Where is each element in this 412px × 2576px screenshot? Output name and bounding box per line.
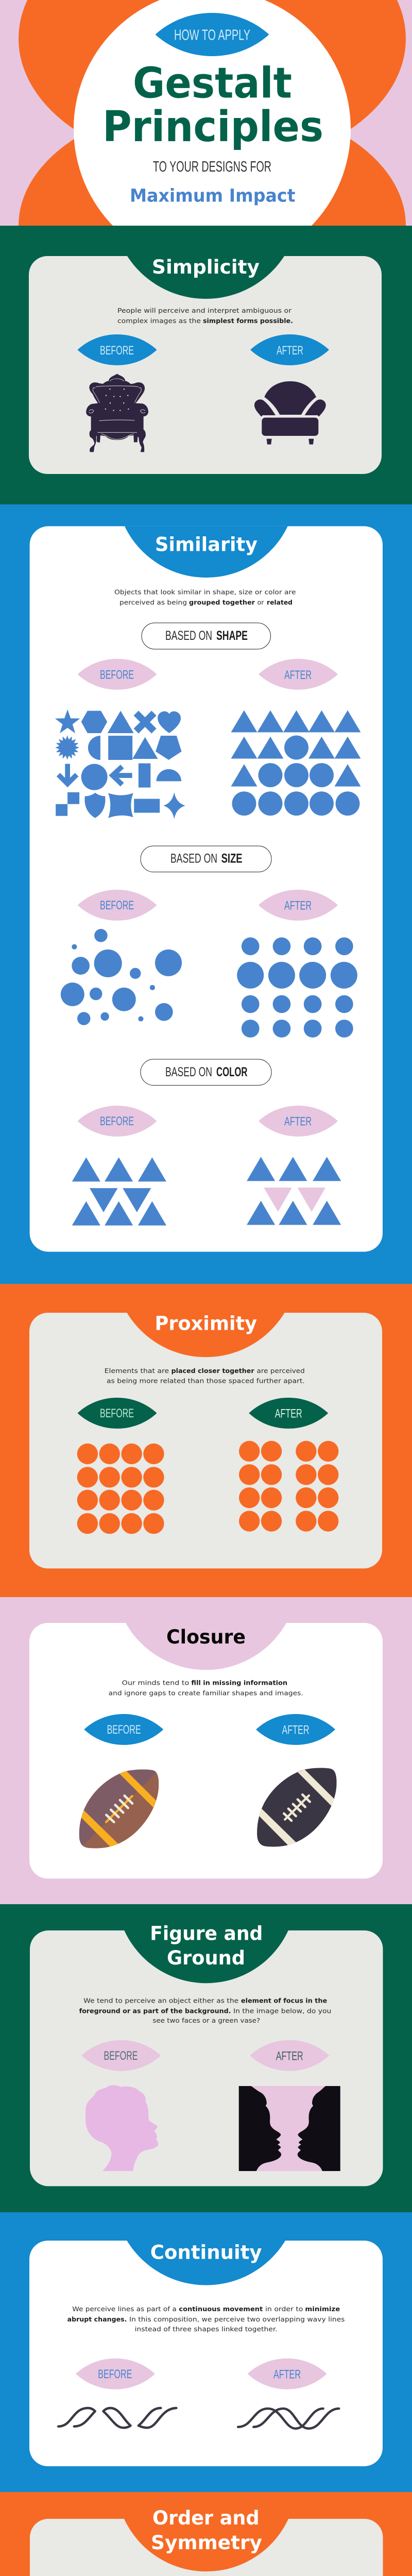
label: before: BEFORE bbox=[100, 899, 134, 912]
label: before: BEFORE bbox=[104, 2049, 138, 2063]
label: before bbox=[81, 2040, 161, 2071]
description: foreground or as part of the background. bbox=[79, 2007, 231, 2014]
icon: faces and vase illusion bbox=[239, 2086, 340, 2171]
icon: football after bbox=[257, 1768, 337, 1846]
panel: similarity bbox=[0, 504, 412, 1284]
panel: continuity bbox=[0, 2212, 412, 2492]
heading: proximity: Proximity bbox=[154, 1313, 257, 1335]
label: after bbox=[248, 2359, 327, 2389]
icon: head silhouette bbox=[85, 2085, 158, 2171]
pill: based on shape: BASED ON bbox=[165, 629, 212, 643]
shapes: grouped triangles and circles after bbox=[231, 710, 361, 816]
description: continuous movement bbox=[179, 2305, 263, 2313]
label: before bbox=[84, 1714, 163, 1745]
label: after bbox=[259, 1106, 338, 1137]
label: before bbox=[77, 1106, 157, 1137]
title: Gestalt Principles bbox=[102, 59, 323, 151]
pill: based on size: SIZE bbox=[221, 851, 243, 866]
description: element of focus in the bbox=[241, 1996, 327, 2004]
label: after bbox=[259, 659, 338, 690]
label: before: BEFORE bbox=[100, 1114, 134, 1128]
badge: how to apply: HOW TO APPLY bbox=[174, 27, 250, 43]
title: Gestalt Principles: Gestalt bbox=[133, 59, 292, 108]
label: before: BEFORE bbox=[98, 2367, 132, 2381]
description: simplest forms possible. bbox=[203, 317, 293, 325]
label: after: AFTER bbox=[282, 1723, 309, 1737]
description bbox=[67, 2305, 345, 2333]
label: after: AFTER bbox=[284, 1115, 312, 1129]
pill: based on shape bbox=[142, 623, 271, 649]
icon: football before bbox=[79, 1769, 159, 1849]
description: and ignore gaps to create familiar shapes and images. bbox=[109, 1689, 303, 1697]
heading: order and symmetry: Symmetry bbox=[151, 2532, 262, 2554]
description: We perceive lines as part of a bbox=[72, 2305, 177, 2313]
title: Gestalt Principles: Principles bbox=[102, 103, 323, 151]
description: minimize bbox=[305, 2305, 340, 2313]
panel: figure and ground bbox=[0, 1904, 412, 2212]
description: People will perceive and interpret ambiguous or bbox=[117, 307, 292, 314]
badge: how to apply bbox=[156, 13, 269, 56]
pill: based on color: BASED ON bbox=[165, 1065, 212, 1079]
description: see two faces or a green vase? bbox=[152, 2016, 260, 2024]
description: or bbox=[258, 599, 264, 606]
heading: order and symmetry: Order and bbox=[152, 2507, 260, 2529]
panel: proximity bbox=[0, 1284, 412, 1597]
label: before bbox=[77, 334, 157, 365]
label: after bbox=[249, 1398, 328, 1429]
label: after: AFTER bbox=[273, 2368, 301, 2382]
label: before: BEFORE bbox=[100, 344, 134, 358]
description: Our minds tend to bbox=[122, 1679, 189, 1686]
shapes: blue and pink triangles after bbox=[247, 1157, 341, 1225]
description: In this composition, we perceive two overlapping wavy lines bbox=[129, 2315, 345, 2323]
shapes: ordered circles after bbox=[237, 937, 357, 1038]
icon: ornate armchair bbox=[86, 374, 148, 452]
heading: closure: Closure bbox=[166, 1626, 246, 1648]
description: We tend to perceive an object either as the bbox=[83, 1996, 239, 2004]
description bbox=[109, 1679, 303, 1697]
label: before bbox=[77, 659, 157, 690]
shapes: random circles before bbox=[61, 929, 182, 1025]
pill: based on size bbox=[141, 846, 271, 872]
description: in order to bbox=[265, 2305, 303, 2313]
icon: simple armchair bbox=[254, 381, 326, 445]
label: after bbox=[259, 890, 338, 921]
description bbox=[79, 1996, 331, 2024]
description: complex images as the bbox=[117, 317, 201, 325]
subtitle: TO YOUR DESIGNS FOR bbox=[153, 159, 271, 175]
panel: simplicity bbox=[0, 226, 412, 504]
label: after: AFTER bbox=[275, 1407, 302, 1421]
description: Elements that are bbox=[105, 1367, 169, 1375]
label: after: AFTER bbox=[284, 899, 312, 913]
description: grouped together bbox=[189, 599, 255, 606]
label: after bbox=[250, 334, 329, 365]
heading: simplicity: Simplicity bbox=[152, 256, 260, 278]
label: after: AFTER bbox=[276, 2049, 303, 2063]
panel: closure bbox=[29, 1623, 383, 1878]
description: instead of three shapes linked together. bbox=[135, 2325, 278, 2333]
label: after bbox=[250, 2040, 329, 2071]
description: perceived as being bbox=[119, 599, 187, 606]
label: before: BEFORE bbox=[107, 1723, 141, 1737]
pill: based on color bbox=[141, 1059, 271, 1085]
description: are perceived bbox=[256, 1367, 305, 1375]
label: before bbox=[76, 2359, 155, 2389]
description: related bbox=[267, 599, 293, 606]
label: before bbox=[77, 890, 157, 921]
label: before: BEFORE bbox=[100, 1406, 134, 1420]
description: abrupt changes. bbox=[67, 2315, 127, 2323]
heading: figure and ground bbox=[150, 1922, 263, 1969]
heading: order and symmetry bbox=[151, 2507, 262, 2554]
heading: figure and ground: Ground bbox=[167, 1947, 245, 1969]
label: after: AFTER bbox=[284, 668, 312, 682]
label: before: BEFORE bbox=[100, 668, 134, 682]
description: as being more related than those spaced further apart. bbox=[107, 1377, 305, 1385]
description: fill in missing information bbox=[191, 1679, 287, 1686]
label: after: AFTER bbox=[277, 344, 303, 358]
header: title block bbox=[0, 0, 412, 349]
description: Objects that look similar in shape, size or color are bbox=[114, 588, 296, 596]
description: placed closer together bbox=[171, 1367, 254, 1375]
description bbox=[117, 307, 293, 325]
pill: based on size: BASED ON bbox=[170, 851, 217, 866]
description bbox=[105, 1367, 305, 1385]
pill: based on shape: SHAPE bbox=[216, 629, 248, 643]
pill: based on color: COLOR bbox=[216, 1065, 247, 1079]
shapes: blue triangles before bbox=[72, 1157, 166, 1226]
heading: figure and ground: Figure and bbox=[150, 1922, 263, 1944]
label: after bbox=[256, 1714, 335, 1745]
label: before bbox=[77, 1398, 157, 1429]
icon: three linked shapes before bbox=[58, 2408, 176, 2428]
description bbox=[114, 588, 296, 606]
shapes: evenly spaced dots before bbox=[77, 1444, 164, 1534]
description: In the image below, do you bbox=[233, 2007, 331, 2014]
heading: similarity: Similarity bbox=[155, 533, 258, 555]
panel: order and symmetry bbox=[0, 2492, 412, 2576]
subtitle highlight: maximum impact: Maximum Impact bbox=[130, 185, 296, 206]
shapes: grouped dots after bbox=[239, 1441, 338, 1532]
icon: two wavy lines after bbox=[238, 2409, 339, 2429]
heading: continuity: Continuity bbox=[150, 2242, 262, 2264]
shapes: mixed shapes before bbox=[55, 709, 185, 819]
